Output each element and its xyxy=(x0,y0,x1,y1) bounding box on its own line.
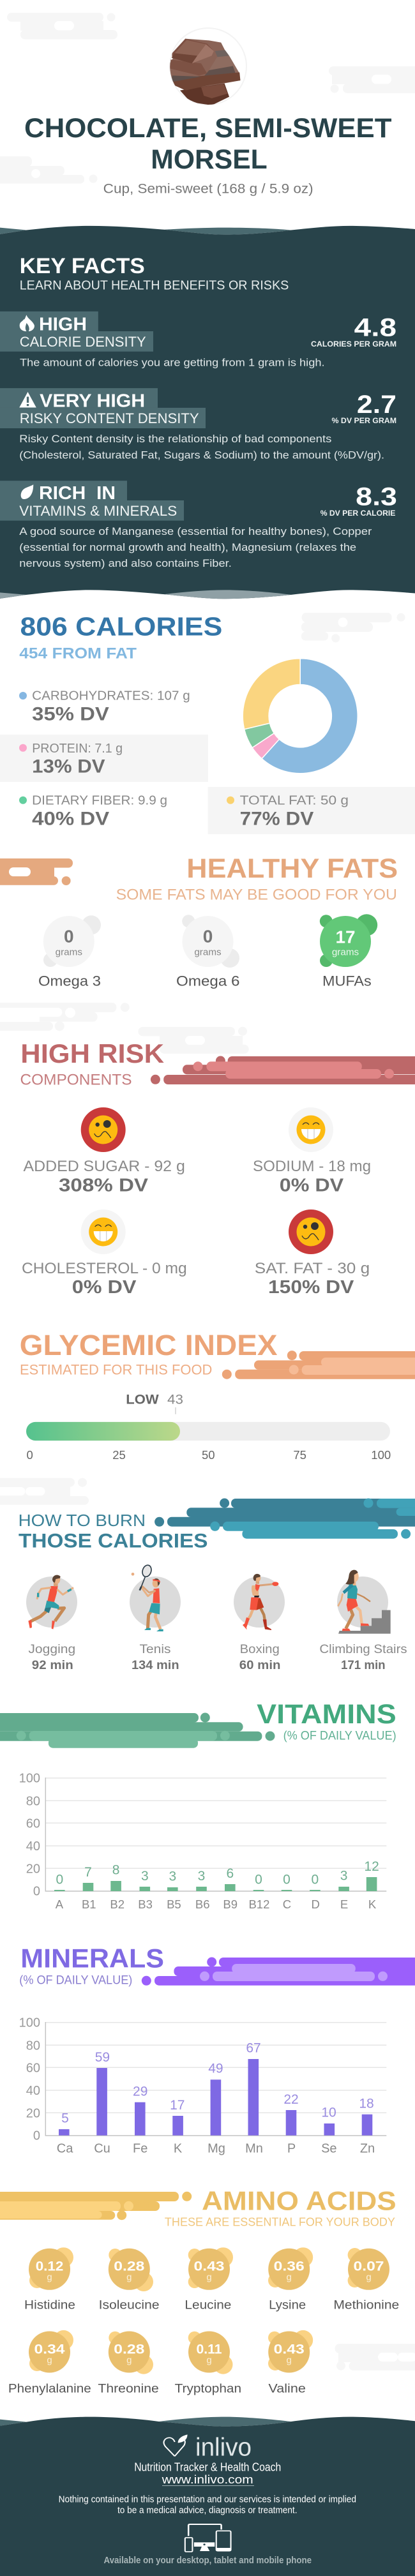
item: added sugar: ADDED SUGAR - 92 g xyxy=(23,1158,185,1175)
bar chart: minerals: 40 xyxy=(26,2084,40,2098)
band decoration xyxy=(0,858,73,885)
icon: boxer xyxy=(234,1574,285,1630)
item: sodium: SODIUM - 18 mg xyxy=(253,1158,371,1175)
bar chart: vitamins: 0 xyxy=(255,1873,262,1887)
amino: histidine: Histidine xyxy=(24,2299,75,2312)
bar chart: vitamins: 100 xyxy=(19,1772,40,1786)
amino: methionine: g xyxy=(366,2272,372,2283)
item: omega 3: grams xyxy=(56,947,82,958)
bar chart: vitamins: B2 xyxy=(110,1898,124,1911)
logo: inlivo: inlivo xyxy=(195,2434,252,2462)
bar chart: minerals: Cu xyxy=(94,2142,110,2156)
item: sodium xyxy=(253,1107,371,1195)
amino: isoleucine: Isoleucine xyxy=(99,2299,160,2312)
icon: flame xyxy=(20,315,34,331)
bar chart: minerals: P xyxy=(287,2142,296,2156)
amino: isoleucine xyxy=(99,2249,160,2312)
heading: 806 CALORIES xyxy=(20,612,222,641)
amino: threonine: 0.28 xyxy=(114,2342,145,2356)
amino: histidine: 0.12 xyxy=(36,2259,63,2273)
fact: calorie density: CALORIES PER GRAM xyxy=(311,340,396,348)
amino: isoleucine: 0.28 xyxy=(114,2259,145,2273)
legend: protein xyxy=(0,735,208,782)
amino: histidine xyxy=(24,2247,75,2312)
amino: leucine: Leucine xyxy=(185,2299,231,2312)
bar chart: vitamins: E xyxy=(340,1898,348,1911)
legend: protein: 13% DV xyxy=(32,756,105,777)
gauge bar xyxy=(26,1422,390,1441)
donut chart xyxy=(243,659,358,774)
fact: rich in vitamins and minerals: VITAMINS & MINERALS xyxy=(19,503,177,519)
panel: glycemic index xyxy=(20,1329,415,1462)
bar chart: minerals: 80 xyxy=(26,2039,40,2053)
item: omega 6: 0 xyxy=(203,927,213,947)
bar chart: vitamins: 40 xyxy=(26,1839,40,1853)
icon: leaf xyxy=(21,484,33,499)
footer background wave xyxy=(0,2417,415,2576)
bar chart: vitamins: K xyxy=(368,1898,377,1911)
amino: valine xyxy=(268,2330,313,2395)
item: cholesterol xyxy=(22,1209,187,1298)
item: MUFAs xyxy=(320,914,377,989)
bar chart: minerals xyxy=(19,2016,386,2156)
bar chart: vitamins: 0 xyxy=(56,1873,63,1887)
item: omega 6: grams xyxy=(194,947,222,958)
background cloud: top right xyxy=(329,66,415,93)
amino: leucine: 0.43 xyxy=(194,2259,225,2273)
item: saturated fat: 150% DV xyxy=(268,1277,354,1298)
band decoration xyxy=(151,1056,415,1084)
amino: tryptophan: 0.11 xyxy=(197,2342,222,2356)
item: cholesterol: CHOLESTEROL - 0 mg xyxy=(22,1260,187,1277)
activity: climbing stairs xyxy=(319,1570,407,1672)
heading: GLYCEMIC INDEX xyxy=(20,1329,277,1361)
bar chart: minerals: 60 xyxy=(26,2061,40,2075)
heading: MINERALS xyxy=(20,1943,164,1973)
fact: calorie density: CALORIE DENSITY xyxy=(20,334,146,350)
icon: happy face xyxy=(289,1107,333,1152)
bar chart: vitamins: 3 xyxy=(198,1869,205,1883)
icon: sad face xyxy=(81,1107,126,1152)
bar chart: vitamins: B12 xyxy=(248,1898,269,1911)
fact: calorie density xyxy=(0,311,396,368)
bar chart: vitamins: 3 xyxy=(340,1869,347,1883)
legend: dietary fiber xyxy=(19,794,167,829)
bar chart: vitamins: B1 xyxy=(82,1898,96,1911)
bar chart: vitamins: 0 xyxy=(33,1885,40,1899)
bar chart: vitamins: 80 xyxy=(26,1794,40,1808)
amino: leucine: g xyxy=(206,2272,212,2283)
item: omega 6 xyxy=(176,915,240,989)
fact: rich in vitamins and minerals: (essential for normal growth and health), Magnesium (relaxes the xyxy=(19,542,356,553)
fact: risky content density: RISKY CONTENT DENSITY xyxy=(20,410,199,426)
bar chart: minerals: 29 xyxy=(133,2084,147,2099)
amino: threonine xyxy=(98,2331,159,2395)
icon: tennis player xyxy=(130,1564,181,1631)
panel: high risk xyxy=(20,1038,415,1298)
amino: valine: Valine xyxy=(268,2382,306,2395)
bar chart: minerals: 17 xyxy=(170,2098,185,2113)
bar chart: vitamins: 3 xyxy=(169,1869,176,1884)
icon: devices xyxy=(185,2524,231,2552)
fact: risky content density: (Cholesterol, Saturated Fat, Sugars & Sodium) to the amount (%DV/gr). xyxy=(19,449,384,461)
bar chart: vitamins: 6 xyxy=(226,1866,234,1881)
panel: vitamins xyxy=(0,1699,396,1911)
gauge axis: 25 xyxy=(112,1448,126,1462)
logo: inlivo xyxy=(164,2434,252,2462)
availability note: Available on your desktop, tablet and mobile phone xyxy=(103,2555,312,2566)
bar chart: minerals: 49 xyxy=(208,2062,223,2076)
gauge axis: 0 xyxy=(27,1448,33,1462)
panel: calories xyxy=(0,612,415,834)
amino: lysine xyxy=(268,2247,313,2312)
amino: lysine: 0.36 xyxy=(274,2259,305,2273)
gauge label xyxy=(126,1393,183,1414)
legend: total fat xyxy=(208,787,415,834)
subheading: (% OF DAILY VALUE) xyxy=(19,1973,132,1987)
activity: tennis: 134 min xyxy=(132,1658,179,1672)
bar chart: minerals: Mn xyxy=(245,2142,263,2156)
gauge axis: 100 xyxy=(371,1448,391,1462)
bar chart: vitamins: 0 xyxy=(283,1873,290,1887)
activity: jogging: Jogging xyxy=(28,1642,75,1656)
fact: risky content density: Risky Content density is the relationship of bad components xyxy=(19,433,331,445)
bar chart: vitamins: B9 xyxy=(223,1898,238,1911)
fact: risky content density: VERY HIGH xyxy=(40,391,145,411)
item: omega 6: Omega 6 xyxy=(176,973,240,989)
panel: how to burn those calories xyxy=(19,1499,415,1672)
fact: rich in vitamins and minerals: RICH IN xyxy=(39,483,116,504)
disclaimer: to be a medical advice, diagnosis or treatment. xyxy=(117,2505,298,2515)
activity: jogging: 92 min xyxy=(32,1658,73,1672)
activity: jogging xyxy=(26,1575,77,1672)
amino: phenylalanine xyxy=(8,2330,91,2395)
legend: protein: PROTEIN: 7.1 g xyxy=(32,742,123,756)
amino: phenylalanine: g xyxy=(47,2355,52,2366)
activity: tennis: Tenis xyxy=(139,1642,171,1656)
activity: boxing xyxy=(234,1574,285,1672)
bar chart: vitamins: A xyxy=(56,1898,64,1911)
subheading: ESTIMATED FOR THIS FOOD xyxy=(20,1362,212,1378)
amino: threonine: Threonine xyxy=(98,2382,159,2395)
disclaimer: Nothing contained in this presentation and our services is intended or implied xyxy=(59,2494,356,2505)
activity: climbing stairs: Climbing Stairs xyxy=(319,1642,407,1656)
bar chart: minerals: 5 xyxy=(61,2111,69,2126)
icon: jogger xyxy=(26,1575,77,1629)
panel: healthy fats xyxy=(0,853,398,989)
bar chart: minerals: Mg xyxy=(207,2142,225,2156)
bar chart: minerals: 0 xyxy=(33,2129,40,2143)
background cloud: left above burn xyxy=(0,1478,89,1505)
band decoration xyxy=(222,1351,415,1379)
bar chart: minerals: 18 xyxy=(359,2097,374,2111)
bar chart: minerals: K xyxy=(174,2142,183,2156)
bar chart: vitamins: 20 xyxy=(26,1862,40,1876)
title: CHOCOLATE, SEMI-SWEET xyxy=(24,113,392,144)
subheading: COMPONENTS xyxy=(20,1072,132,1088)
panel: amino acids xyxy=(0,2186,399,2395)
serving size: Cup, Semi-sweet (168 g / 5.9 oz) xyxy=(103,182,313,197)
background cloud: top left xyxy=(7,13,117,40)
item: MUFAs: 17 xyxy=(336,927,355,947)
subheading: THESE ARE ESSENTIAL FOR YOUR BODY xyxy=(165,2215,395,2229)
gauge axis: 50 xyxy=(202,1448,215,1462)
legend: carbohydrates: 35% DV xyxy=(32,703,109,724)
amino: methionine xyxy=(333,2248,399,2312)
bar chart: minerals: 67 xyxy=(246,2041,261,2056)
bar chart: vitamins xyxy=(19,1772,386,1911)
bar chart: vitamins: 8 xyxy=(112,1863,119,1878)
title: MORSEL xyxy=(151,144,268,175)
title xyxy=(24,113,392,175)
background cloud: centre above high risk xyxy=(138,1027,249,1054)
item: MUFAs: MUFAs xyxy=(322,973,372,989)
subheading: 454 FROM FAT xyxy=(19,645,137,663)
amino: valine: 0.43 xyxy=(274,2342,305,2356)
bar chart: minerals: 22 xyxy=(283,2092,299,2107)
subheading: (% OF DAILY VALUE) xyxy=(283,1729,396,1743)
amino: methionine: Methionine xyxy=(333,2299,399,2312)
item: added sugar: 308% DV xyxy=(59,1175,149,1195)
fact: calorie density: HIGH xyxy=(39,314,87,334)
amino: valine: g xyxy=(287,2355,292,2366)
amino: tryptophan: Tryptophan xyxy=(175,2382,241,2395)
amino: methionine: 0.07 xyxy=(354,2259,384,2273)
item: sodium: 0% DV xyxy=(280,1175,344,1195)
legend: dietary fiber: DIETARY FIBER: 9.9 g xyxy=(32,794,167,808)
activity: boxing: Boxing xyxy=(240,1642,280,1656)
bar chart: minerals: 20 xyxy=(26,2106,40,2120)
fact: rich in vitamins and minerals: % DV PER CALORIE xyxy=(321,509,395,518)
bar chart: minerals: 59 xyxy=(95,2050,110,2065)
footer panel xyxy=(0,2417,415,2576)
amino: isoleucine: g xyxy=(126,2272,132,2283)
fact: risky content density: 2.7 xyxy=(357,391,396,419)
activity: tennis xyxy=(130,1564,181,1672)
disclaimer xyxy=(59,2494,356,2515)
item: omega 3: 0 xyxy=(64,927,74,947)
heading: VITAMINS xyxy=(257,1699,396,1730)
bar chart: minerals: Zn xyxy=(360,2142,375,2156)
legend: carbohydrates: CARBOHYDRATES: 107 g xyxy=(32,689,190,703)
item: omega 3: Omega 3 xyxy=(38,973,101,989)
item: MUFAs: grams xyxy=(332,947,359,958)
activity: boxing: 60 min xyxy=(239,1658,281,1672)
amino: tryptophan: g xyxy=(206,2355,212,2366)
fact: calorie density: The amount of calories you are getting from 1 gram is high. xyxy=(20,357,325,368)
gauge axis xyxy=(27,1448,391,1462)
heading: AMINO ACIDS xyxy=(202,2186,396,2216)
item: cholesterol: 0% DV xyxy=(72,1277,137,1298)
bar chart: vitamins: 60 xyxy=(26,1816,40,1831)
amino: threonine: g xyxy=(126,2355,132,2366)
header: food photo xyxy=(169,28,246,105)
amino: tryptophan xyxy=(175,2331,241,2395)
panel: how to burn those calories: THOSE CALORIES xyxy=(19,1529,208,1552)
heading: HIGH RISK xyxy=(20,1038,164,1068)
bar chart: vitamins: D xyxy=(312,1898,320,1911)
fact: rich in vitamins and minerals: A good source of Manganese (essential for healthy bones), Copper xyxy=(19,526,372,537)
legend: total fat: TOTAL FAT: 50 g xyxy=(240,794,349,808)
heading: KEY FACTS xyxy=(20,254,145,278)
amino: lysine: Lysine xyxy=(269,2299,306,2312)
icon: sad face xyxy=(289,1209,333,1254)
amino: phenylalanine: Phenylalanine xyxy=(8,2382,91,2395)
bar chart: minerals: 10 xyxy=(321,2106,336,2120)
bar chart: vitamins: B6 xyxy=(195,1898,210,1911)
bar chart: vitamins: B5 xyxy=(167,1898,181,1911)
panel background wave xyxy=(0,226,415,603)
fact: risky content density: % DV PER GRAM xyxy=(332,416,396,425)
background cloud: left above high risk xyxy=(0,1003,130,1031)
bar chart: vitamins: 12 xyxy=(364,1859,379,1874)
fact: calorie density: 4.8 xyxy=(354,314,396,342)
icon: happy face xyxy=(81,1209,126,1254)
item: saturated fat: SAT. FAT - 30 g xyxy=(255,1260,370,1277)
bar chart: minerals: Se xyxy=(321,2142,337,2156)
heading: HEALTHY FATS xyxy=(186,853,398,884)
fact: rich in vitamins and minerals: nervous system) and also contains Fiber. xyxy=(19,558,232,569)
subheading: LEARN ABOUT HEALTH BENEFITS OR RISKS xyxy=(20,278,289,292)
bar chart: vitamins: B3 xyxy=(138,1898,153,1911)
bar chart: vitamins: 7 xyxy=(84,1865,92,1880)
panel: minerals xyxy=(19,1943,415,2156)
gauge label: LOW xyxy=(126,1393,159,1407)
icon: chocolate pieces xyxy=(169,39,240,105)
legend: total fat: 77% DV xyxy=(240,808,314,829)
band decoration xyxy=(155,1499,415,1539)
fact: risky content density xyxy=(0,388,396,461)
amino: leucine xyxy=(185,2247,233,2312)
item: saturated fat xyxy=(255,1209,370,1298)
band decoration xyxy=(142,1957,415,1986)
icon: woman on stairs xyxy=(337,1570,391,1634)
bar chart: minerals: 100 xyxy=(19,2016,40,2030)
bar chart: minerals: Ca xyxy=(57,2142,73,2156)
background cloud: left of subtitle xyxy=(0,156,97,184)
background cloud: right of amino acids xyxy=(335,2344,415,2370)
fact: rich in vitamins and minerals xyxy=(0,481,397,569)
band decoration xyxy=(0,1713,275,1748)
amino: histidine: g xyxy=(47,2272,52,2283)
subheading: SOME FATS MAY BE GOOD FOR YOU xyxy=(116,887,397,903)
gauge label: 43 xyxy=(167,1393,183,1407)
legend: carbohydrates xyxy=(19,689,190,724)
amino: lysine: g xyxy=(287,2272,292,2283)
background cloud: calories xyxy=(301,613,405,642)
panel: key facts xyxy=(0,226,415,603)
bar chart: vitamins: 3 xyxy=(141,1869,149,1883)
item: omega 3 xyxy=(38,915,101,989)
bar chart: vitamins: C xyxy=(283,1898,291,1911)
item: added sugar xyxy=(23,1107,185,1195)
legend: dietary fiber: 40% DV xyxy=(32,808,110,829)
heading: HOW TO BURN xyxy=(19,1512,146,1530)
bar chart: minerals: Fe xyxy=(133,2142,147,2156)
amino: phenylalanine: 0.34 xyxy=(34,2342,65,2356)
fact: rich in vitamins and minerals: 8.3 xyxy=(356,483,397,511)
activity: climbing stairs: 171 min xyxy=(341,1658,386,1672)
tagline: Nutrition Tracker & Health Coach xyxy=(134,2460,281,2473)
band decoration xyxy=(0,2192,192,2220)
website link: www.inlivo.com xyxy=(162,2473,253,2486)
icon: warning triangle xyxy=(19,392,36,408)
bar chart: vitamins: 0 xyxy=(312,1873,319,1887)
gauge axis: 75 xyxy=(293,1448,306,1462)
